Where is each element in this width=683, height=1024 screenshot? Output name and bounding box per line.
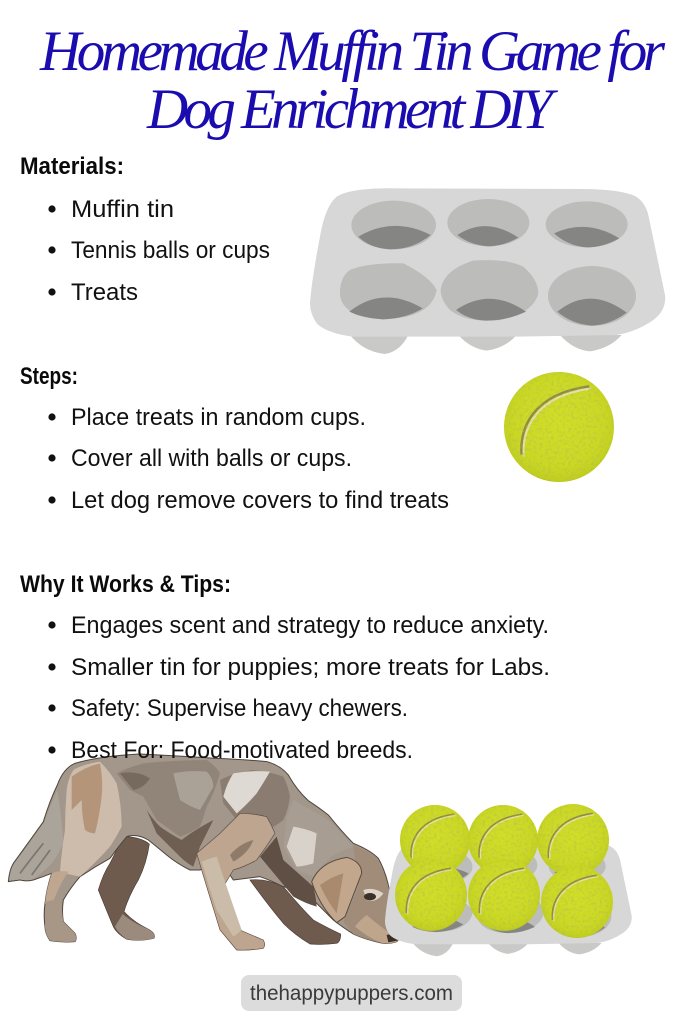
icon: tennis ball [504, 372, 614, 482]
list: steps: Let dog remove covers to find treats [71, 487, 449, 514]
website badge [241, 975, 462, 1011]
website badge: thehappypuppers.com [250, 982, 453, 1005]
list: steps: Place treats in random cups. [71, 404, 366, 431]
far hind leg [98, 837, 155, 940]
ear [312, 857, 362, 923]
tail fur [9, 790, 63, 881]
illustration: dog sniffing [8, 754, 400, 950]
list: materials: Treats [71, 279, 138, 306]
list: tips: Smaller tin for puppies; more treats for Labs. [71, 654, 550, 681]
heading: materials: Materials: [20, 153, 124, 180]
body [8, 754, 400, 943]
illustration: muffin tin with tennis balls [385, 804, 632, 956]
title: Dog Enrichment DIY [146, 78, 558, 141]
panel: materials [20, 153, 270, 306]
list: materials: Tennis balls or cups [71, 237, 270, 264]
panel: steps [20, 363, 449, 514]
list: tips: Safety: Supervise heavy chewers. [71, 695, 408, 722]
list item: best for: Best For: Food-motivated breeds. [71, 737, 413, 764]
tennis balls [395, 804, 613, 938]
panel: why it works and tips [20, 571, 550, 722]
title [39, 20, 666, 141]
title: Homemade Muffin Tin Game for [39, 20, 666, 83]
back shading [117, 760, 220, 837]
haunch [60, 762, 122, 877]
shoulder [220, 770, 290, 830]
near front leg [197, 813, 275, 950]
list: steps [48, 404, 449, 514]
icon: muffin tin [310, 188, 665, 354]
list: materials [48, 196, 270, 306]
heading: steps: Steps: [20, 363, 78, 390]
list: steps: Cover all with balls or cups. [71, 445, 352, 472]
list: materials: Muffin tin [71, 196, 174, 223]
neck [283, 800, 353, 877]
far front leg [250, 880, 341, 944]
heading: why it works: Why It Works & Tips: [20, 571, 231, 598]
head [343, 845, 400, 943]
list: tips: Engages scent and strategy to reduce anxiety. [71, 612, 549, 639]
list: tips [48, 612, 550, 722]
tin base [385, 841, 632, 956]
